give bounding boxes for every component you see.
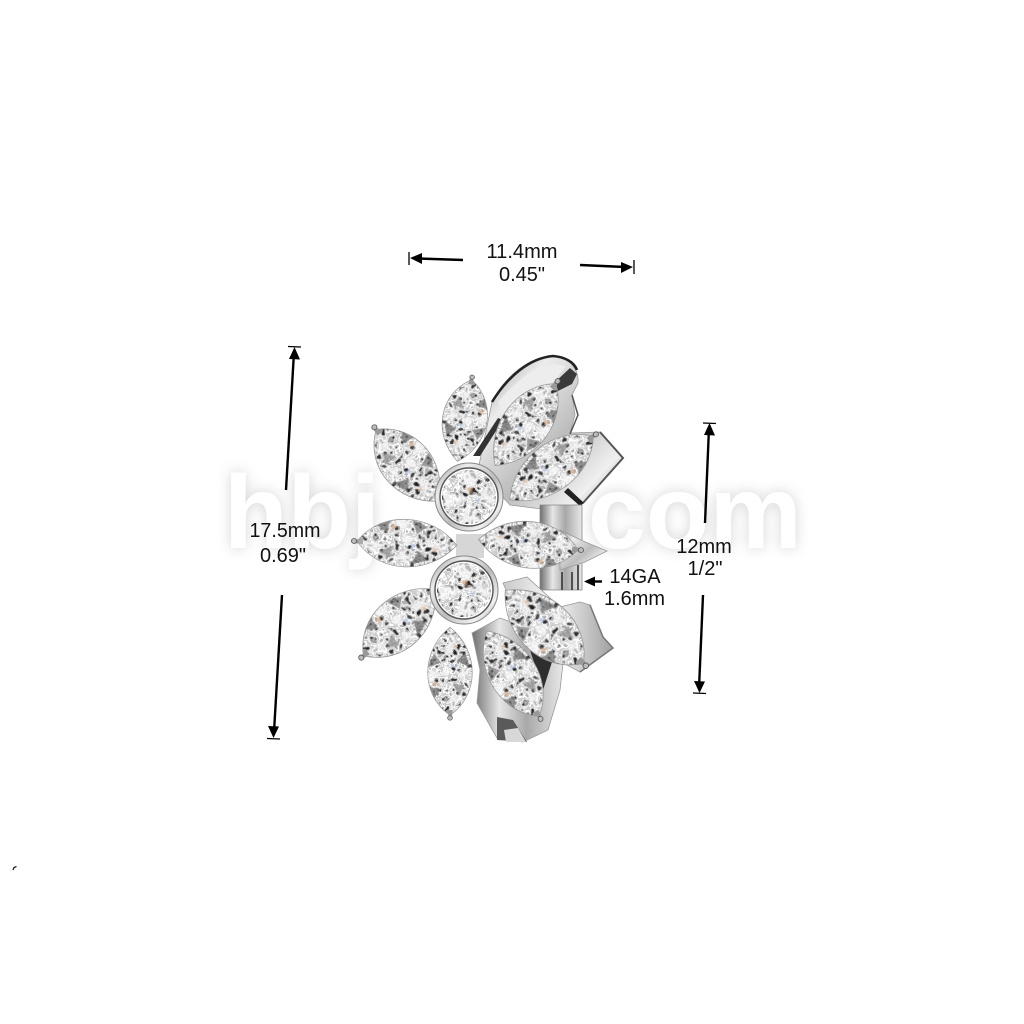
metal: notch edge <box>570 395 578 434</box>
metal: pointed tip <box>560 530 607 570</box>
stone: upper right <box>471 362 582 484</box>
metal: lower back shadow <box>530 650 552 690</box>
length dimension: 0.69" <box>260 545 306 567</box>
length dimension <box>250 346 320 739</box>
watermark: com <box>588 455 802 571</box>
arrow: height top <box>703 423 716 523</box>
metal: upper leaf plate <box>478 356 623 512</box>
metal: stripe between stones <box>473 418 503 456</box>
stone: right <box>491 410 615 523</box>
metal: lower leaf plate <box>503 577 613 672</box>
metal: upper rim highlight <box>492 356 577 402</box>
metal: upper leaf dark band <box>553 368 577 392</box>
width dimension: 0.45" <box>499 264 545 286</box>
metal: hinge column <box>540 505 582 590</box>
stone: middle left <box>350 512 460 574</box>
jewelry: clicker back metal <box>456 356 623 742</box>
stone: middle right <box>474 511 586 578</box>
metal: rear edge <box>583 432 623 503</box>
label: gauge: 14GA <box>609 566 661 588</box>
height dimension <box>676 423 732 694</box>
width dimension <box>409 241 634 286</box>
arrow: width right <box>580 260 634 274</box>
metal: hinge opening <box>497 717 527 742</box>
stone: lower left <box>339 566 458 682</box>
gauge dimension <box>584 566 665 610</box>
stone: lower right inner <box>461 614 566 736</box>
watermark: hbj <box>224 455 380 571</box>
stone: upper left <box>350 405 463 523</box>
stone: lower right outer <box>482 565 610 691</box>
watermark overlay on stones: hbj <box>224 455 380 571</box>
metal: dark cut <box>564 488 584 506</box>
metal: hinge pin <box>504 728 526 742</box>
stray mark <box>13 866 16 870</box>
metal: lower leaf edge <box>580 605 613 672</box>
label: height: 12mm <box>676 536 732 558</box>
metal: lower band <box>472 618 563 742</box>
height dimension: 1/2" <box>688 558 722 580</box>
arrow: gauge <box>584 576 602 586</box>
arrow: width left <box>409 252 463 265</box>
stone: top <box>431 370 499 468</box>
stones: marquise petals <box>339 362 615 736</box>
label: length: 17.5mm <box>250 520 320 542</box>
metal: column stripes <box>562 565 578 590</box>
metal: centre connector <box>456 534 484 558</box>
arrow: length bottom <box>267 595 282 739</box>
stone: bottom <box>423 625 477 720</box>
upper round bezel stone <box>435 463 503 531</box>
label: width: 11.4mm <box>486 241 558 263</box>
arrow: length top <box>286 346 301 490</box>
metal: upper bright face <box>498 364 566 420</box>
watermark <box>224 455 802 571</box>
lower round bezel stone <box>430 556 498 624</box>
arrow: height bottom <box>693 595 706 694</box>
gauge dimension: 1.6mm <box>604 588 665 610</box>
